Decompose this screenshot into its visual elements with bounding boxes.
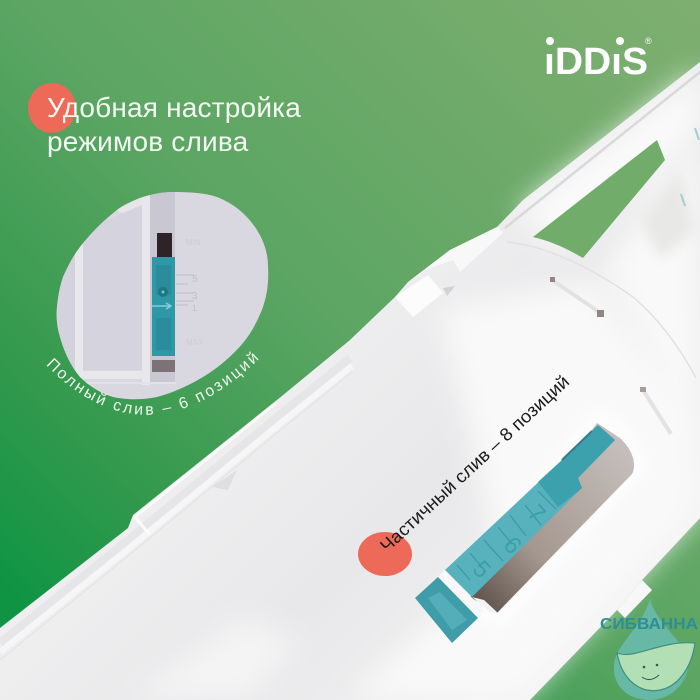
- brand logo: IDDIS: ıDDıS: [544, 41, 648, 83]
- vent slit upper: [550, 277, 604, 317]
- teal scale slider: 7: [522, 500, 551, 528]
- lens recessed panel: [83, 221, 104, 243]
- teal slider: [152, 257, 175, 356]
- vent slit right: [640, 387, 671, 434]
- heading: режимов слива: [47, 126, 249, 157]
- teal push button: [415, 577, 478, 643]
- watermark logo: Sibvanna: [600, 598, 698, 700]
- upper arm inner green gap: [533, 140, 665, 258]
- embossed scale: 5: [192, 274, 198, 285]
- cap arc line: [507, 242, 696, 378]
- embossed scale: [176, 238, 204, 347]
- smudge on the far right part: [640, 170, 695, 260]
- rotated caption: partial flush: Частичный слив – 8 позиций: [376, 371, 573, 556]
- inset lens: full flush scale: [56, 192, 268, 400]
- curved caption: full flush: Полный слив – 6 позиций: [46, 351, 258, 415]
- water drop: [614, 598, 688, 700]
- scale tick marks: [457, 491, 556, 580]
- scale channel: [150, 190, 175, 382]
- embossed scale: 3: [192, 291, 198, 302]
- lower-right clip on body edge: [617, 580, 652, 618]
- light stripe at slot base: [472, 597, 498, 613]
- scale numbers: 5: [467, 556, 496, 584]
- dark slot: [157, 233, 172, 257]
- clip tab: [395, 275, 443, 317]
- teal reflections at far right: [681, 128, 699, 206]
- lens left strip: [56, 254, 75, 370]
- heading: Удобная настройка: [47, 92, 301, 123]
- clip tab upper part: [408, 227, 503, 282]
- clip notch: [443, 286, 455, 296]
- soft lights on the body: [127, 70, 700, 700]
- embossed scale: MAX: [186, 338, 204, 347]
- lower dark slot: [152, 360, 175, 372]
- wordmark: СИБВАННА: [600, 616, 698, 633]
- coral accent circle on partial flush caption: [358, 532, 412, 576]
- white divider under slider: [438, 570, 484, 618]
- panel frame: [79, 192, 146, 385]
- slot window: [470, 423, 634, 613]
- smiling bathtub: [617, 643, 695, 691]
- slot frame: [452, 411, 645, 630]
- coral accent circle behind heading: [28, 83, 76, 133]
- embossed scale: MIN: [186, 238, 201, 247]
- teal scale slider: [445, 425, 615, 597]
- brand logo: IDDIS: ®: [645, 36, 652, 46]
- teal scale slider: 6: [498, 532, 527, 560]
- body edge rails: [0, 358, 350, 643]
- embossed scale: 1: [192, 303, 197, 313]
